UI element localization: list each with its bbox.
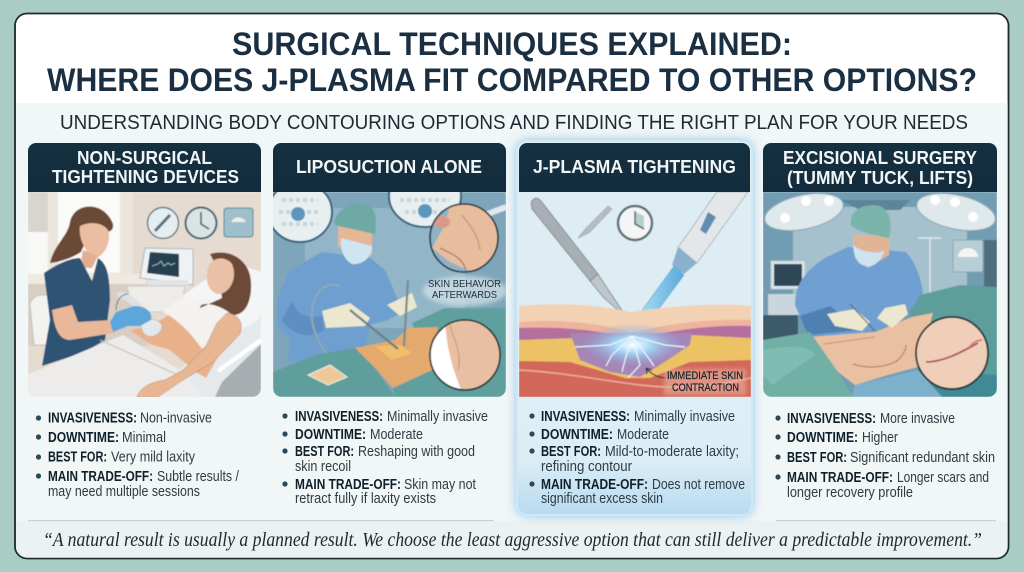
text list: liposuction: MAIN TRADE-OFF: — [295, 477, 401, 493]
skin — [808, 313, 933, 385]
text list: excisional surgery: More invasive — [880, 411, 955, 427]
illustration: surgeon performing excision — [761, 187, 999, 397]
text list: liposuction: Minimally invasive — [387, 409, 488, 425]
patient head — [200, 252, 251, 315]
drape right — [910, 285, 997, 397]
icon: syringe — [148, 208, 178, 238]
sheet — [28, 334, 180, 397]
icon: plasma wand — [640, 192, 748, 321]
surgical lights — [761, 187, 999, 237]
inset: thigh skin — [430, 320, 500, 392]
table — [852, 370, 942, 397]
drape left — [273, 348, 395, 397]
text list: liposuction: DOWNTIME: — [295, 427, 366, 443]
plasma lightning — [575, 336, 685, 378]
text list: liposuction: retract fully if laxity exists — [295, 491, 436, 507]
text list: non-surgical: Subtle results / — [157, 469, 240, 485]
subtitle: UNDERSTANDING BODY CONTOURING OPTIONS AND FINDING THE RIGHT PLAN FOR YOUR NEEDS — [60, 111, 968, 134]
title: WHERE DOES J-PLASMA FIT COMPARED TO OTHER OPTIONS? — [47, 62, 977, 98]
surgical lights — [273, 192, 462, 244]
drape right — [393, 308, 506, 397]
text list: non-surgical: Very mild laxity — [111, 450, 196, 466]
panel: excisional surgery — [761, 143, 999, 501]
text list: j-plasma: BEST FOR: — [541, 444, 601, 460]
header: liposuction — [273, 143, 506, 192]
text list: liposuction: INVASIVENESS: — [295, 409, 383, 425]
label: skin behavior afterwards: AFTERWARDS — [432, 290, 497, 301]
header: excisional surgery: EXCISIONAL SURGERY — [783, 148, 977, 168]
belly — [355, 327, 438, 388]
panel: j-plasma tightening (highlighted) — [516, 140, 753, 516]
text list: non-surgical: INVASIVENESS: — [48, 410, 137, 426]
text list: liposuction — [282, 409, 488, 507]
text list: non-surgical: MAIN TRADE-OFF: — [48, 469, 153, 485]
panel: liposuction alone — [268, 143, 507, 507]
header: non-surgical: NON-SURGICAL — [77, 148, 212, 168]
text list: non-surgical — [36, 410, 240, 500]
illustration: nurse treating patient with device — [27, 192, 261, 397]
text list: j-plasma: INVASIVENESS: — [541, 409, 630, 425]
icon: clock — [618, 206, 652, 240]
icon: large scalpel — [531, 198, 627, 318]
label box — [423, 276, 507, 306]
text list: excisional surgery: Higher — [862, 430, 898, 446]
tube — [312, 285, 360, 397]
surgeon head — [337, 226, 373, 256]
text list: liposuction: Moderate — [370, 427, 423, 443]
text list: non-surgical: Non-invasive — [140, 410, 212, 426]
monitor — [771, 261, 805, 289]
patient top — [163, 298, 224, 350]
text list: liposuction: skin recoil — [295, 459, 351, 475]
gloves — [322, 303, 370, 328]
icon: scale — [224, 208, 253, 237]
icon: small scalpel — [578, 206, 612, 238]
header: j-plasma: J-PLASMA TIGHTENING — [533, 157, 736, 177]
text list: j-plasma: DOWNTIME: — [541, 427, 613, 443]
header: j-plasma — [519, 143, 750, 192]
text list: j-plasma: significant excess skin — [541, 491, 663, 507]
title: SURGICAL TECHNIQUES EXPLAINED: — [232, 26, 792, 62]
text list: excisional surgery: INVASIVENESS: — [787, 411, 876, 427]
nurse hair — [50, 206, 113, 263]
monitor — [140, 248, 193, 285]
inset: scar — [916, 317, 988, 389]
cannula — [350, 310, 398, 349]
nurse scrubs — [42, 258, 110, 366]
text list: liposuction: Skin may not — [404, 477, 476, 493]
text list: j-plasma: refining contour — [541, 459, 632, 475]
text list: j-plasma: Minimally invasive — [634, 409, 735, 425]
text list: liposuction: Reshaping with good — [358, 444, 475, 460]
label: skin behavior afterwards — [428, 280, 500, 298]
text list: excisional surgery — [775, 411, 995, 501]
inset: jaw skin — [430, 204, 498, 272]
gown — [795, 247, 923, 335]
text list: non-surgical: BEST FOR: — [48, 450, 107, 466]
skin layers — [519, 304, 751, 333]
gauge — [953, 240, 983, 272]
illustration: tools and skin cross-section — [519, 192, 751, 397]
surgeon gown — [277, 252, 405, 363]
chair — [30, 295, 52, 345]
text list: j-plasma: Mild-to-moderate laxity; — [605, 444, 739, 460]
panel: non-surgical tightening devices — [27, 143, 261, 500]
title — [47, 26, 977, 98]
text list: non-surgical: DOWNTIME: — [48, 430, 119, 446]
label: skin behavior afterwards: SKIN BEHAVIOR — [428, 279, 501, 290]
patient torso — [130, 314, 218, 378]
bed — [182, 267, 261, 330]
glove and device — [141, 319, 162, 336]
text list: non-surgical: may need multiple sessions — [48, 484, 200, 500]
text list: excisional surgery: BEST FOR: — [787, 450, 847, 466]
surgeon head — [853, 235, 889, 268]
text list: excisional surgery: Longer scars and — [897, 470, 989, 486]
header: non-surgical — [28, 143, 261, 192]
patient arm — [137, 313, 241, 397]
text list: excisional surgery: MAIN TRADE-OFF: — [787, 470, 893, 486]
text list: excisional surgery: Significant redundant skin — [850, 450, 995, 466]
gloves — [827, 309, 870, 331]
header: excisional surgery — [763, 143, 997, 192]
illustration: surgeon performing liposuction — [273, 192, 506, 397]
text list: liposuction: BEST FOR: — [295, 444, 354, 460]
label: immediate skin contraction: IMMEDIATE SKIN — [667, 370, 743, 382]
label: immediate skin contraction — [667, 370, 743, 394]
text halo — [664, 369, 746, 395]
iv pole — [918, 237, 941, 300]
nurse arm — [52, 305, 114, 340]
header: liposuction: LIPOSUCTION ALONE — [296, 157, 482, 177]
device cable — [116, 292, 144, 308]
arrow — [646, 368, 665, 378]
text list: j-plasma: MAIN TRADE-OFF: — [541, 477, 648, 493]
text list: j-plasma: Does not remove — [652, 477, 745, 493]
drape left — [763, 332, 853, 397]
label: immediate skin contraction: CONTRACTION — [672, 382, 739, 394]
text list: excisional surgery: DOWNTIME: — [787, 430, 858, 446]
text list: j-plasma — [529, 409, 745, 507]
icon: clock — [186, 208, 216, 238]
text list: j-plasma: Moderate — [617, 427, 669, 443]
text list: non-surgical: Minimal — [122, 430, 166, 446]
header: excisional surgery: (TUMMY TUCK, LIFTS) — [787, 168, 973, 188]
text list: excisional surgery: longer recovery profile — [787, 485, 913, 501]
header: non-surgical: TIGHTENING DEVICES — [52, 167, 239, 187]
